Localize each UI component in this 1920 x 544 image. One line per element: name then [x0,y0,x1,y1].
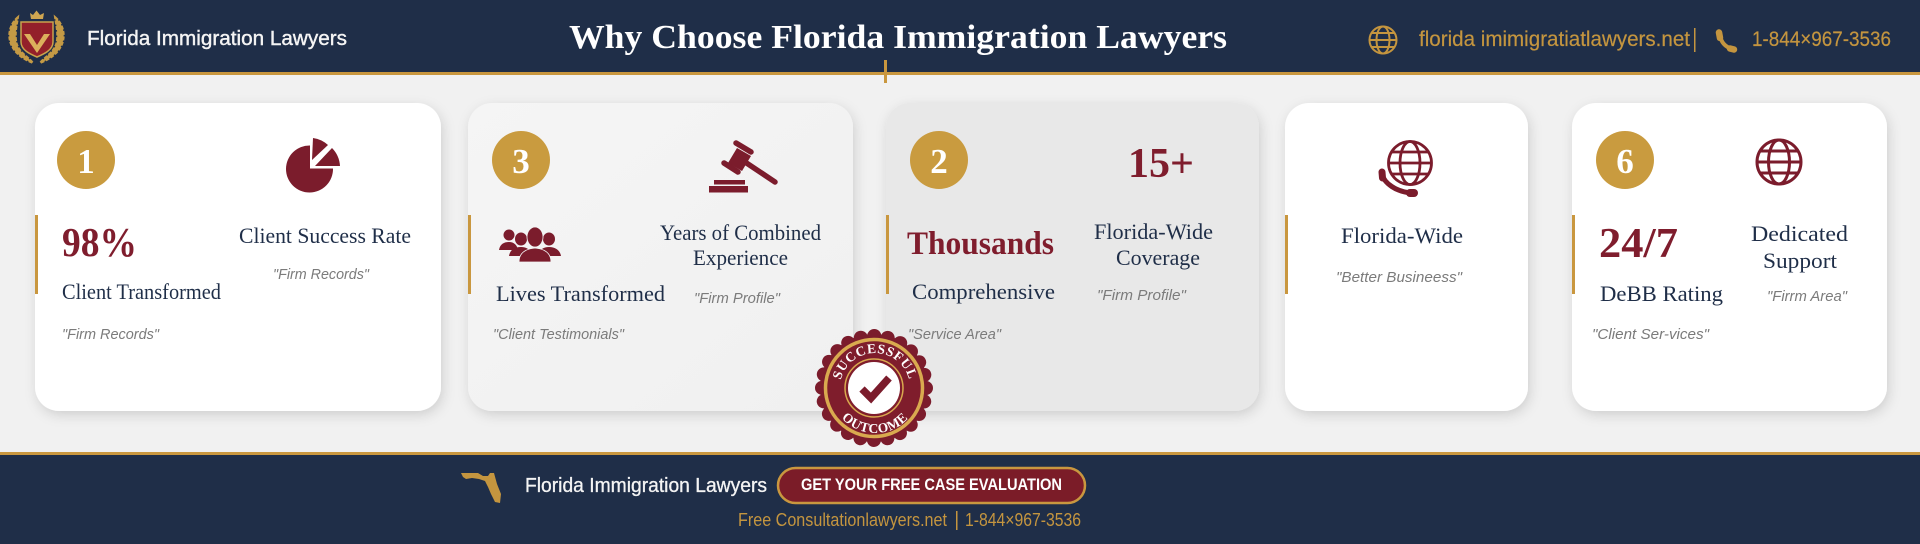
label right [1751,221,1848,273]
phone number: 1-844×967-3536 [1752,28,1891,51]
icon: globe [1370,26,1396,54]
label right: Years of Combined [660,220,821,245]
badge 3: 3 [512,142,530,181]
seal: successful outcome [815,329,933,447]
call to action button [778,468,1085,503]
icon: globe with phone [1382,142,1432,193]
badge 1 [57,131,115,189]
label: Client Transformed [62,279,221,304]
footer phone: 1-844×967-3536 [965,509,1081,530]
footer website: Free Consultationlawyers.net [738,509,947,530]
icon: phone [1719,32,1734,50]
badge 6: 6 [1616,142,1634,181]
source right: "Firm Profile" [1097,288,1187,304]
icon: pie chart [286,138,340,192]
label right: Experience [693,245,788,270]
footer brand: Florida Immigration Lawyers [525,475,767,497]
website: florida imimigratiatlawyers.net [1419,28,1690,51]
icon: gavel [709,143,775,192]
label: Florida-Wide [1341,223,1463,248]
stat 98%: 98% [62,219,137,265]
footer bar [0,452,1920,544]
badge 2 [910,131,968,189]
label right: Client Success Rate [239,223,411,248]
badge 6 [1596,131,1654,189]
badge 3 [492,131,550,189]
header bar [0,0,1920,83]
logo crest [9,10,64,63]
seal: successful outcome: OUTCOME [843,412,908,433]
icon: people [499,227,561,262]
source right: "Firrm Area" [1767,289,1848,305]
icon: florida map [461,473,501,503]
label right: Coverage [1116,245,1200,270]
label right [1094,219,1213,270]
source right: "Firm Profile" [694,291,781,307]
title: Why Choose Florida Immigration Lawyers [569,19,1227,56]
label right: Florida-Wide [1094,219,1213,244]
stat 15+: 15+ [1128,141,1194,187]
label: Comprehensive [912,279,1055,304]
label: DeBB Rating [1600,281,1723,306]
label right: Support [1763,248,1837,273]
source: "Client Testimonials" [493,327,625,343]
source: "Client Ser-vices" [1592,327,1710,343]
panel: card 3 coverage [886,103,1259,411]
label right [660,220,821,270]
call to action button: GET YOUR FREE CASE EVALUATION [801,475,1062,494]
label right: Dedicated [1751,221,1848,246]
seal: successful outcome: SUCCESSFUL [833,344,916,380]
source right: "Firm Records" [273,267,370,283]
icon: globe [1757,140,1801,184]
stat thousands: Thousands [907,226,1054,262]
source: "Service Area" [908,327,1002,343]
panel: card 5 support [1572,103,1887,411]
panel: card 1 success rate [35,103,441,411]
label: Lives Transformed [496,281,665,306]
badge 2: 2 [930,142,948,181]
panel: card 2 experience [468,103,853,411]
badge 1: 1 [77,142,95,181]
panel: card 4 florida-wide [1285,103,1528,411]
brand name: Florida Immigration Lawyers [87,28,347,50]
source: "Firm Records" [62,327,160,343]
stat 24/7: 24/7 [1599,221,1678,267]
source: "Better Busineess" [1336,270,1463,286]
